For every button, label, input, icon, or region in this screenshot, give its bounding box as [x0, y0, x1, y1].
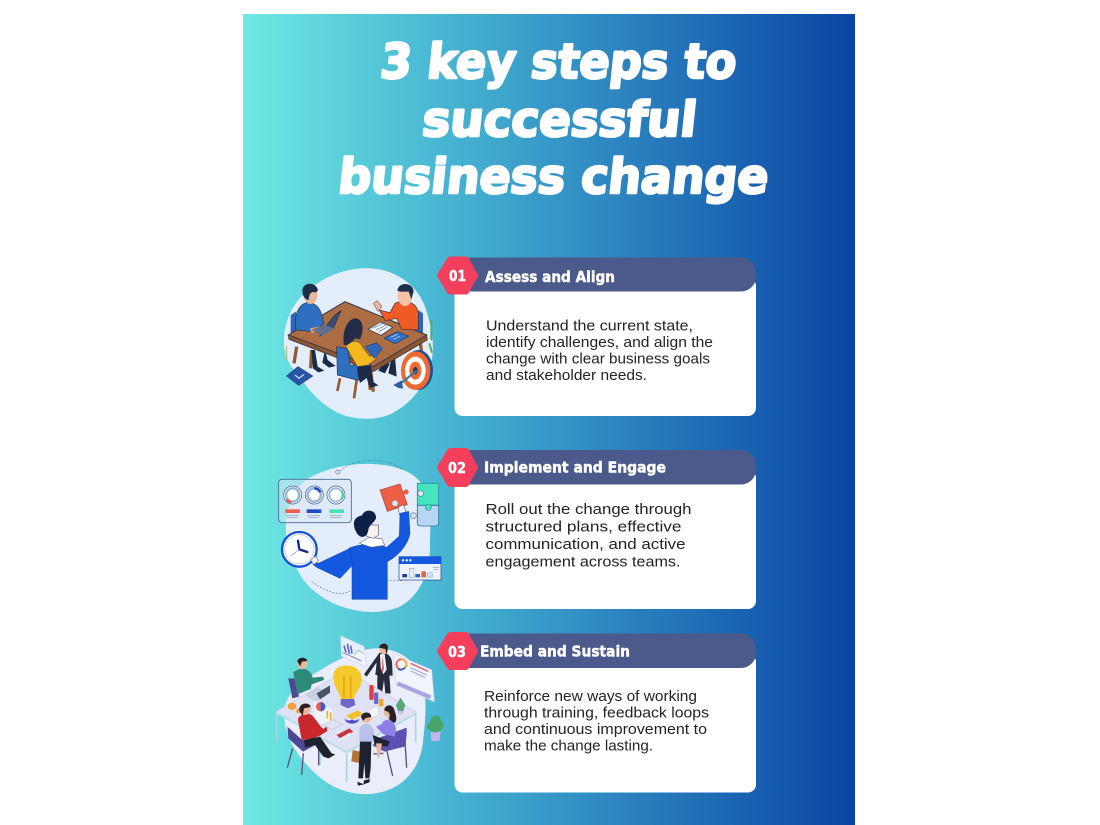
heading 1: Assess and Align — [485, 268, 615, 286]
title: successful — [420, 92, 700, 148]
number hexagon 1 — [440, 260, 475, 292]
body text 3 — [484, 689, 709, 754]
step 1 card — [440, 258, 756, 416]
body text 3: through training, feedback loops — [484, 706, 709, 722]
header bar 3 — [455, 634, 756, 668]
number hexagon 3 — [440, 635, 475, 667]
number hexagon 2 — [440, 451, 475, 484]
card body 3 — [454, 654, 756, 792]
number 01: 01 — [449, 267, 466, 285]
body text 1 — [486, 318, 713, 384]
illustration: team meeting at table — [284, 268, 433, 419]
body text 2 — [486, 502, 692, 570]
body text 2: structured plans, effective — [486, 520, 682, 536]
heading 2: Implement and Engage — [484, 458, 666, 476]
number 02: 02 — [448, 459, 466, 477]
body text 1: change with clear business goals — [486, 352, 710, 368]
background panel — [243, 14, 855, 825]
header bar 1 — [455, 258, 756, 292]
step 2 card — [440, 450, 756, 609]
illustration: person solving puzzle with dashboards — [279, 460, 441, 612]
illustration: team around desk with light bulb — [276, 636, 444, 794]
body text 3: Reinforce new ways of working — [484, 689, 697, 705]
title: business change — [336, 149, 772, 205]
number 03: 03 — [448, 643, 466, 661]
body text 2: Roll out the change through — [486, 502, 692, 518]
step 3 card — [440, 634, 756, 792]
body text 1: and stakeholder needs. — [486, 368, 647, 384]
card body 1 — [454, 278, 756, 416]
body text 1: identify challenges, and align the — [486, 335, 713, 351]
title: 3 key steps to — [378, 34, 740, 90]
body text 1: Understand the current state, — [486, 318, 693, 334]
heading 3: Embed and Sustain — [480, 642, 630, 660]
header bar 2 — [455, 450, 756, 484]
card body 2 — [454, 470, 756, 609]
title — [336, 34, 772, 205]
body text 2: communication, and active — [486, 537, 686, 553]
body text 2: engagement across teams. — [486, 554, 680, 570]
body text 3: and continuous improvement to — [484, 722, 707, 738]
body text 3: make the change lasting. — [484, 738, 653, 754]
